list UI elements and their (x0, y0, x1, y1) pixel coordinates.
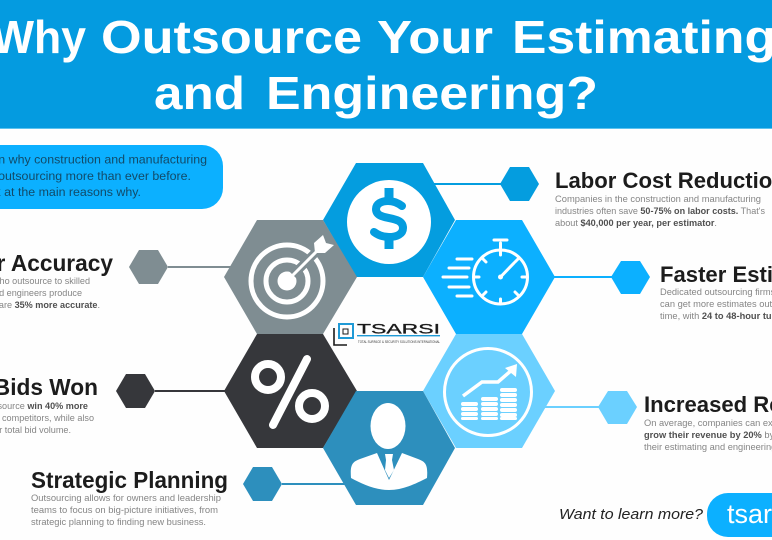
text block: faster estimates (660, 262, 772, 321)
text block: strategic planning: strategic planning to finding new business. (31, 517, 206, 527)
text block: higher accuracy (0, 250, 113, 310)
icon: growth chart (444, 348, 532, 436)
logo: TSARSI: TOTAL SURFACE & SECURITY SOLUTIONS INTERNATIONAL (358, 340, 440, 344)
text block: strategic planning: Outsourcing allows for owners and leadership (31, 493, 221, 503)
connector lines (155, 184, 615, 484)
title: Your (377, 11, 493, 63)
connector node: accuracy (129, 250, 168, 284)
icon: stopwatch (443, 240, 528, 304)
hexagon: labor cost (323, 163, 455, 277)
text block: strategic planning: teams to focus on big-picture initiatives, from (31, 505, 218, 515)
title: Outsource (101, 11, 362, 63)
icon: businessman (351, 403, 427, 490)
header banner (0, 0, 772, 129)
logo: TSARSI (334, 320, 440, 345)
intro callout (0, 145, 223, 209)
hexagon: faster estimates (423, 220, 555, 334)
connector node: labor cost (500, 167, 539, 201)
hexagon: increased revenue (423, 334, 555, 448)
title: and (154, 67, 245, 119)
title: Estimating (512, 11, 772, 63)
hexagon: strategic planning (323, 391, 455, 505)
text block: labor cost reduction (555, 168, 772, 228)
hexagon: accuracy (224, 220, 357, 334)
connector node: faster estimates (611, 261, 650, 294)
text block: strategic planning (31, 467, 228, 527)
text block: more bids won (0, 374, 98, 435)
text block: increased revenue (644, 392, 772, 452)
connector node: increased revenue (598, 391, 637, 424)
website button (707, 493, 772, 537)
call to action: Want to learn more? (559, 506, 704, 523)
connector node: strategic planning (243, 467, 282, 501)
logo: TSARSI: TSARSI (357, 320, 440, 336)
connector node: bids won (116, 374, 155, 408)
icon: percent (255, 359, 325, 425)
text block: faster estimates: Dedicated outsourcing firms (660, 287, 772, 297)
title (0, 11, 772, 119)
title: Engineering? (266, 67, 598, 119)
icon: dollar sign (347, 180, 431, 264)
call to action (559, 493, 772, 537)
text block: labor cost reduction: industries often save 50-75% on labor costs. That's (555, 206, 765, 216)
text block: labor cost reduction: about $40,000 per year, per estimator. (555, 218, 717, 228)
text block: labor cost reduction: Companies in the construction and manufacturing (555, 194, 761, 204)
icon: target (251, 235, 334, 317)
text block: strategic planning: Strategic Planning (31, 467, 228, 493)
hexagon: bids won (224, 334, 357, 448)
